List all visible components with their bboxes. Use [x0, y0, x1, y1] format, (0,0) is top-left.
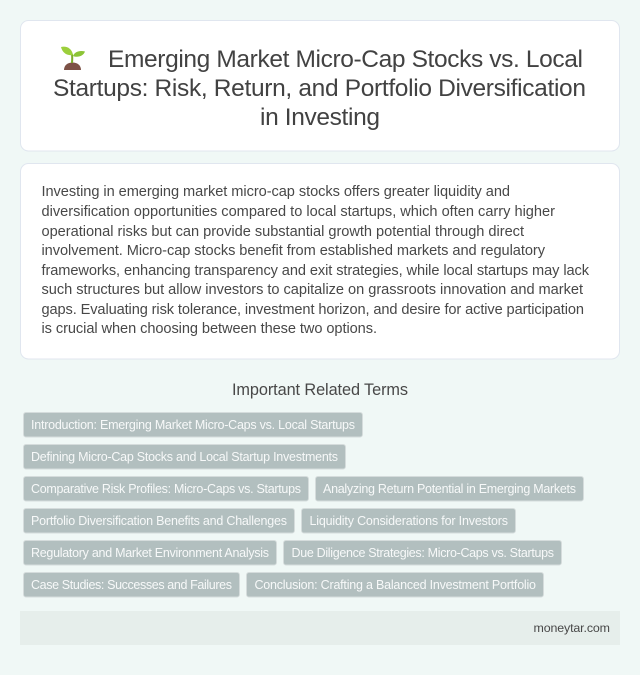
tag: defining	[24, 444, 346, 469]
tag: case studies: Case Studies: Successes and Failures	[31, 578, 232, 592]
text block: summary paragraph: is crucial when choosing between these two options.	[42, 321, 377, 337]
tag: return potential: Analyzing Return Potential in Emerging Markets	[323, 482, 576, 496]
text block: summary paragraph: involvement. Micro-cap stocks benefit from established markets and regulatory	[42, 243, 546, 259]
tag: liquidity	[302, 508, 516, 533]
text block: summary paragraph: frameworks, enhancing transparency and exit strategies, while local startups may lack	[42, 263, 590, 279]
title: in Investing	[260, 104, 380, 131]
tag: conclusion	[246, 572, 544, 597]
icon: seedling	[61, 47, 85, 70]
title: Startups: Risk, Return, and Portfolio Diversification	[53, 75, 586, 102]
title: Emerging Market Micro-Cap Stocks vs. Local	[108, 46, 583, 73]
tag: liquidity: Liquidity Considerations for Investors	[310, 514, 508, 528]
tag: risk profiles	[24, 476, 308, 501]
footer	[20, 611, 620, 645]
panel: title card	[20, 20, 620, 151]
tag: diversification	[24, 508, 294, 533]
tag list	[24, 412, 584, 597]
tag: introduction: Introduction: Emerging Market Micro-Caps vs. Local Startups	[31, 418, 355, 432]
panel: summary card	[20, 164, 620, 359]
tag: return potential	[316, 476, 584, 501]
tag: introduction	[24, 412, 362, 437]
text block: summary paragraph: such structures but allow investors to capitalize on grassroots innovation and market	[42, 282, 583, 298]
tag: diversification: Portfolio Diversification Benefits and Challenges	[31, 514, 287, 528]
text block: summary paragraph: gaps. Evaluating risk tolerance, investment horizon, and desire for active participation	[42, 302, 584, 318]
text block: summary paragraph: Investing in emerging market micro-cap stocks offers greater liquidity and	[42, 184, 510, 200]
tag: risk profiles: Comparative Risk Profiles: Micro-Caps vs. Startups	[31, 482, 301, 496]
heading: important related terms: Important Related Terms	[232, 381, 408, 399]
tag: conclusion: Conclusion: Crafting a Balanced Investment Portfolio	[254, 578, 536, 592]
tag: regulatory: Regulatory and Market Environment Analysis	[31, 546, 269, 560]
footer: moneytar.com	[534, 621, 610, 635]
text block: summary paragraph: diversification opportunities compared to local startups, which often carry higher	[42, 204, 555, 220]
text block: summary paragraph	[42, 184, 590, 337]
title	[53, 46, 586, 131]
text block: summary paragraph: operational risks but can provide substantial growth potential through direct	[42, 224, 524, 240]
tag: defining: Defining Micro-Cap Stocks and Local Startup Investments	[31, 450, 338, 464]
tag: case studies	[24, 572, 240, 597]
tag: due diligence	[284, 540, 562, 565]
tag: due diligence: Due Diligence Strategies: Micro-Caps vs. Startups	[292, 546, 554, 560]
tag: regulatory	[24, 540, 276, 565]
